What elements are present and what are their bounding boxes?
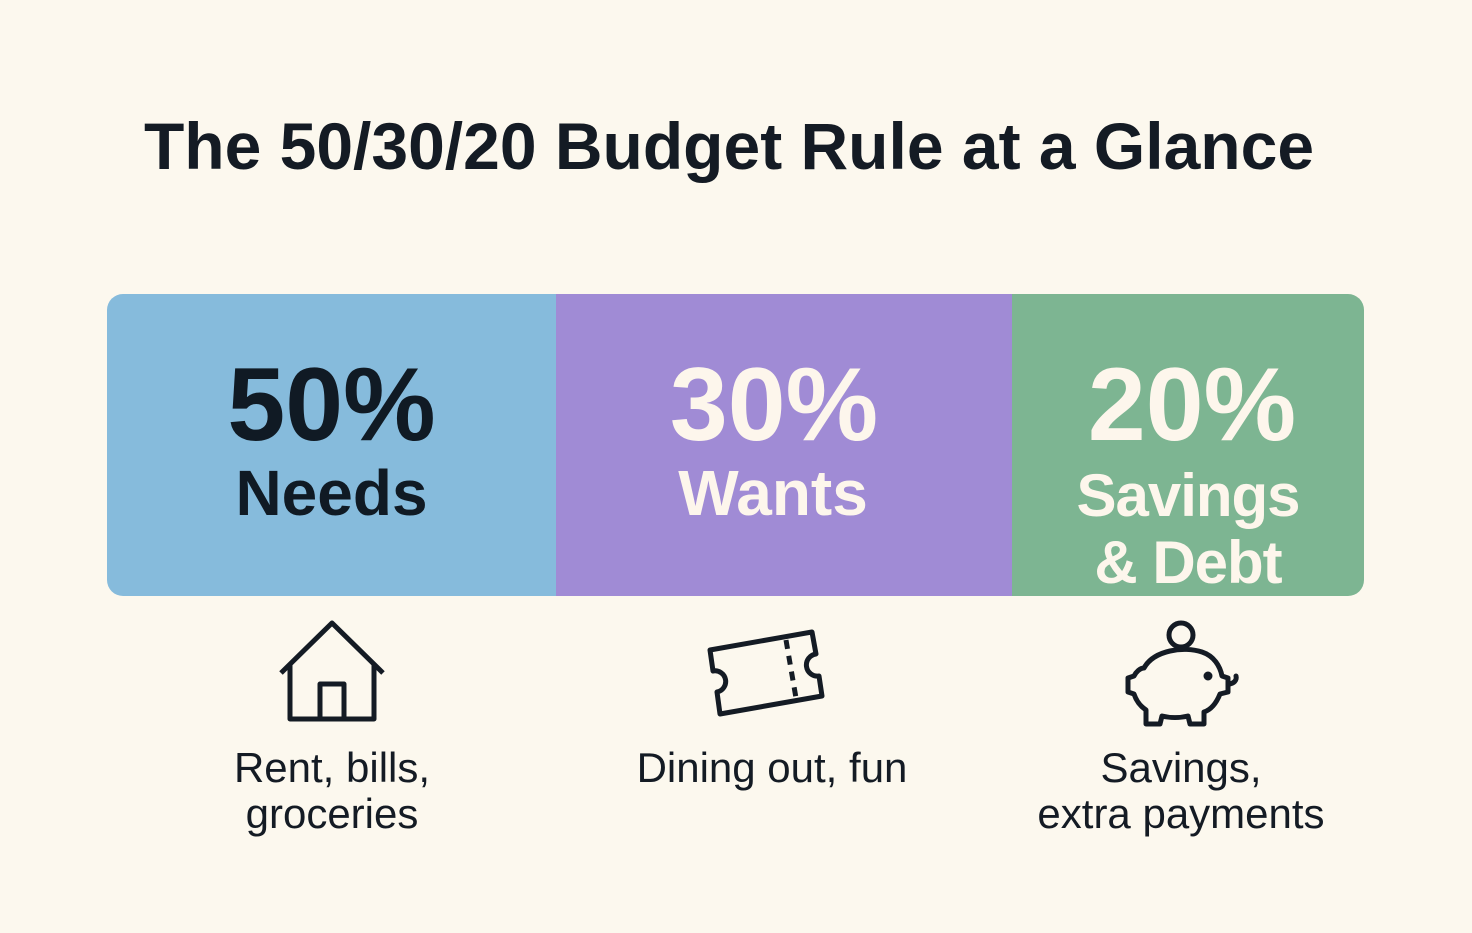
- segment: wants 30%: 30%: [670, 347, 878, 463]
- caption: wants: Dining out, fun: [637, 744, 907, 791]
- caption: needs: groceries: [246, 790, 418, 837]
- caption: needs: Rent, bills,: [234, 744, 430, 791]
- bar: budget split: [107, 294, 1364, 596]
- caption: needs: [234, 744, 430, 837]
- segment: savings & debt 20%: [1012, 294, 1364, 596]
- icon: house: [279, 620, 385, 722]
- segment: wants 30%: [556, 294, 1012, 596]
- segment: needs 50%: [107, 294, 556, 596]
- icon: piggy bank: [1126, 620, 1239, 726]
- segment: savings & debt 20%: 20%: [1088, 347, 1296, 463]
- icon: ticket: [708, 630, 824, 716]
- caption: savings: Savings,: [1100, 744, 1262, 791]
- caption: savings: [1037, 744, 1325, 837]
- segment: needs 50%: Needs: [235, 457, 428, 529]
- segment: needs 50%: 50%: [227, 347, 436, 463]
- segment: wants 30%: Wants: [678, 457, 868, 529]
- title: The 50/30/20 Budget Rule at a Glance: [144, 109, 1314, 183]
- caption: savings: extra payments: [1037, 790, 1325, 837]
- segment: savings & debt 20%: & Debt: [1094, 529, 1282, 596]
- segment: savings & debt 20%: Savings: [1076, 462, 1300, 529]
